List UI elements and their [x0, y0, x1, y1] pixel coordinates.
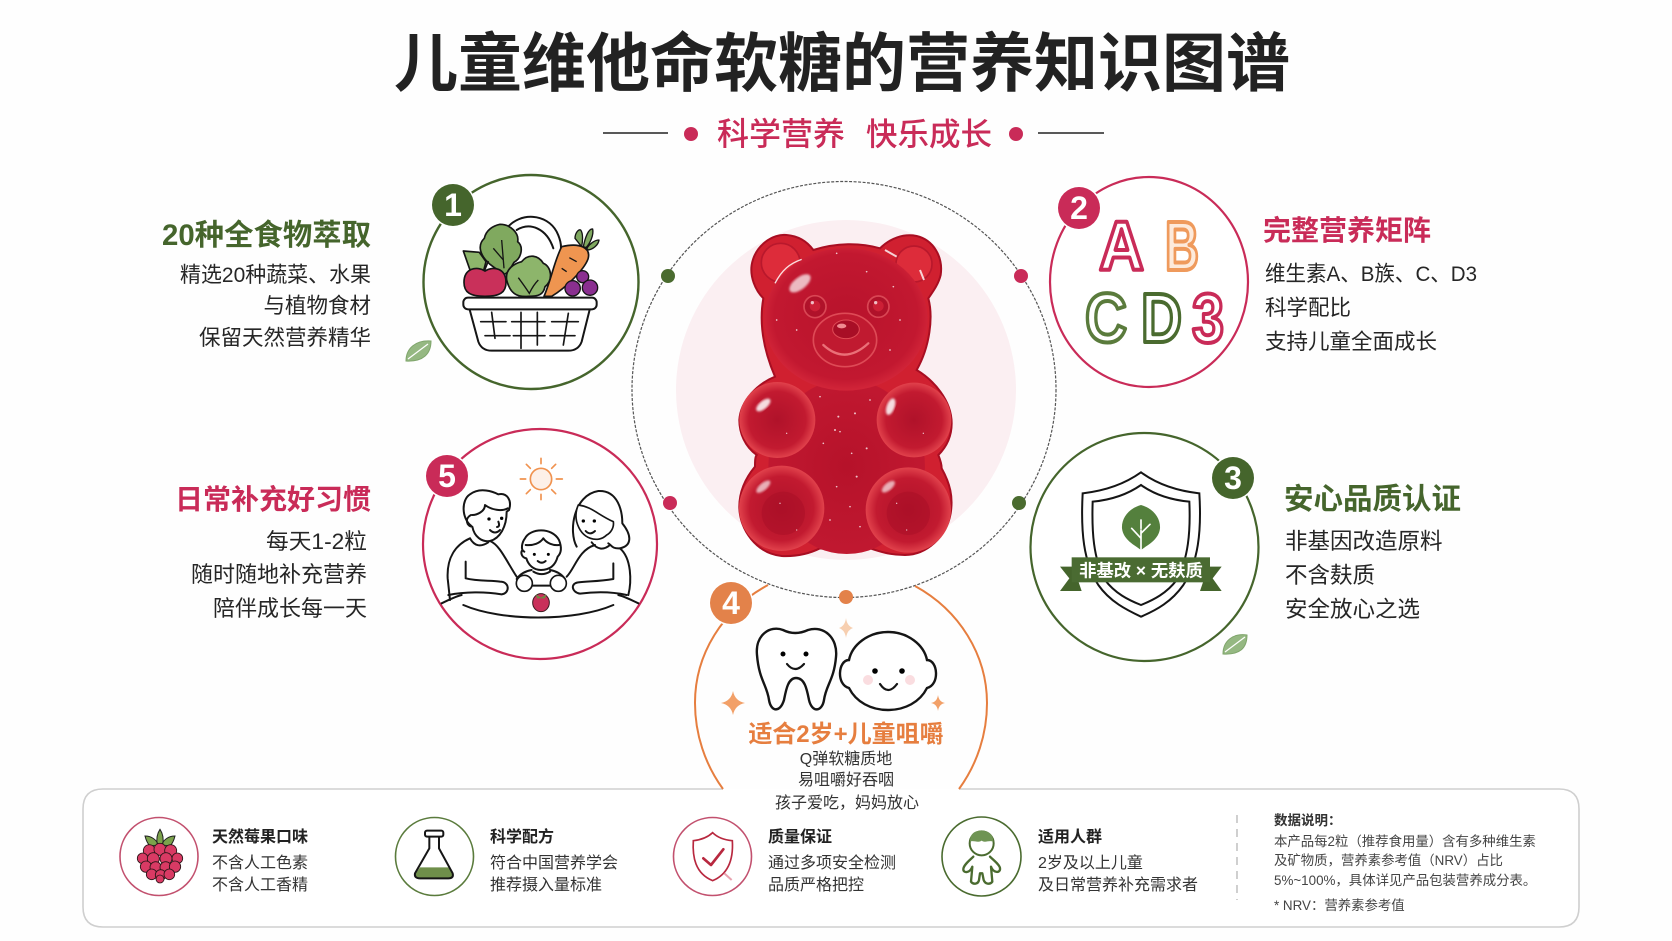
text block: 3: 安全放心之选 — [1285, 597, 1420, 622]
feature: quality assurance — [674, 818, 896, 896]
icon: shield with ribbon: 非基改 × 无麸质 — [1079, 561, 1203, 581]
panel: central gummy bear — [632, 182, 1056, 604]
text block: 4: 易咀嚼好吞咽 — [798, 771, 894, 789]
text: target audience: 适用人群 — [1038, 828, 1102, 846]
subtitle: 科学营养 — [717, 116, 845, 152]
icon: sparkles — [721, 618, 945, 715]
arc frame — [695, 585, 987, 789]
text: scientific formula: 推荐摄入量标准 — [490, 876, 602, 894]
circle frame — [1030, 433, 1258, 661]
title: 儿童维他命软糖的营养知识图谱 — [394, 28, 1290, 100]
vitamin letters: 3 — [1192, 279, 1224, 357]
data notes: 及矿物质，营养素参考值（NRV）占比 — [1274, 852, 1503, 868]
vitamin letters: A — [1099, 207, 1144, 285]
number badge 5 — [424, 454, 470, 498]
icon: leaf accent — [1223, 635, 1247, 654]
vitamin letters — [1085, 207, 1224, 357]
data notes: 本产品每2粒（推荐食用量）含有多种维生素 — [1274, 833, 1536, 849]
panel: bottom feature bar — [83, 789, 1579, 927]
text block: 2: 完整营养矩阵 — [1263, 215, 1431, 246]
number badge 4 — [708, 580, 754, 626]
text block: 1: 与植物食材 — [263, 294, 371, 318]
text block: 3: 不含麸质 — [1285, 563, 1375, 588]
text block: 5: 日常补充好习惯 — [175, 484, 371, 515]
icon: child — [963, 831, 1000, 884]
pink halo — [676, 220, 1016, 560]
text: target audience — [1038, 828, 1198, 894]
orbit nodes — [661, 269, 1028, 604]
icon: shield with ribbon — [1060, 472, 1222, 617]
text: target audience: 2岁及以上儿童 — [1038, 853, 1143, 872]
feature: natural berry — [120, 818, 308, 896]
text block: 3: 非基因改造原料 — [1285, 529, 1443, 554]
icon: smiling child face — [840, 632, 936, 710]
text: scientific formula: 符合中国营养学会 — [490, 854, 618, 872]
number badge 2: 2 — [1070, 190, 1088, 226]
text block: 3 — [1284, 483, 1461, 622]
text block: 5 — [175, 484, 371, 621]
text: scientific formula — [490, 827, 618, 894]
data notes: 数据说明： — [1274, 812, 1342, 828]
text block: 3: 安心品质认证 — [1284, 483, 1461, 516]
text: quality assurance: 品质严格把控 — [768, 876, 864, 894]
text: natural berry: 不含人工色素 — [212, 854, 308, 872]
number badge 2 — [1056, 186, 1102, 230]
text block: 4: Q弹软糖质地 — [800, 750, 892, 768]
number badge 4: 4 — [722, 585, 740, 621]
vitamin letters: C — [1085, 279, 1127, 357]
icon: raspberry — [137, 829, 183, 883]
number badge 5: 5 — [438, 458, 456, 494]
icon: family at table — [442, 458, 638, 617]
panel: 1 whole-food extract — [406, 175, 638, 389]
data notes: * NRV：营养素参考值 — [1274, 897, 1405, 913]
text block: 1: 精选20种蔬菜、水果 — [180, 263, 371, 287]
icon: vegetable basket — [463, 217, 599, 351]
circle frame — [1050, 177, 1248, 387]
text block: 1: 20种全食物萃取 — [162, 219, 371, 252]
subtitle — [603, 116, 1104, 152]
text block: 4: 孩子爱吃，妈妈放心 — [775, 794, 919, 812]
number badge 1: 1 — [444, 187, 462, 223]
text: natural berry: 天然莓果口味 — [212, 827, 308, 846]
circle frame — [423, 429, 657, 659]
text block: 5: 陪伴成长每一天 — [213, 596, 367, 621]
text block: 4: 适合2岁+儿童咀嚼 — [748, 720, 944, 748]
text: quality assurance — [768, 827, 896, 894]
text: natural berry — [212, 827, 308, 894]
text block: 2 — [1263, 215, 1477, 354]
number badge 3: 3 — [1224, 460, 1242, 496]
text block: 4 — [748, 720, 944, 812]
icon: flask — [415, 831, 453, 878]
icon: leaf accent — [406, 341, 431, 361]
icon: check shield — [693, 833, 732, 881]
vitamin letters: B — [1165, 207, 1199, 285]
vitamin letters: D — [1141, 279, 1182, 357]
feature: target audience — [942, 817, 1198, 896]
text block: 5: 随时随地补充营养 — [191, 562, 367, 587]
text: natural berry: 不含人工香精 — [212, 876, 308, 894]
text block: 2: 科学配比 — [1265, 296, 1351, 320]
data notes: 5%~100%，具体详见产品包装营养成分表。 — [1274, 873, 1536, 888]
panel: 4 chewable — [695, 580, 987, 812]
text block: 2: 维生素A、B族、C、D3 — [1265, 262, 1477, 286]
text: quality assurance: 通过多项安全检测 — [768, 854, 896, 872]
subtitle: 快乐成长 — [866, 116, 992, 152]
feature: scientific formula — [396, 818, 618, 896]
circle frame — [424, 175, 638, 389]
data notes — [1274, 812, 1536, 913]
gummy bear — [739, 235, 952, 556]
text block: 1 — [162, 219, 371, 350]
number badge 3 — [1210, 456, 1256, 500]
text: scientific formula: 科学配方 — [490, 827, 554, 846]
panel: 2 nutrient matrix — [1050, 177, 1248, 387]
text block: 2: 支持儿童全面成长 — [1265, 330, 1437, 354]
text: quality assurance: 质量保证 — [768, 827, 832, 846]
panel: 3 quality certification — [1030, 433, 1258, 661]
panel: 5 daily habit — [423, 429, 657, 659]
text block: 1: 保留天然营养精华 — [199, 326, 371, 350]
icon: smiling tooth — [757, 629, 836, 709]
number badge 1 — [430, 182, 476, 228]
bar outline — [83, 789, 1579, 927]
dashed orbit ring — [632, 182, 1056, 598]
text block: 5: 每天1-2粒 — [266, 529, 367, 554]
text: target audience: 及日常营养补充需求者 — [1038, 876, 1198, 894]
